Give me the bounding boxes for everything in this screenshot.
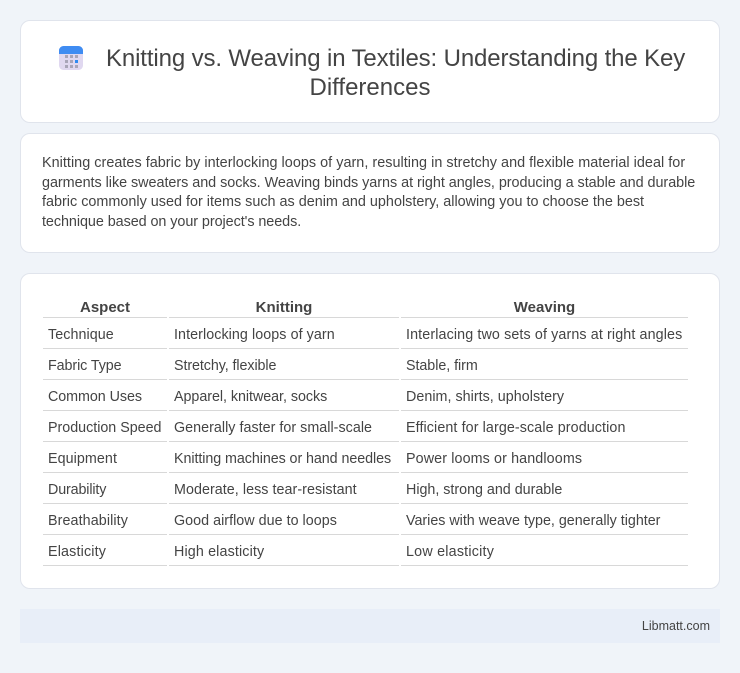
panel: title card: [20, 20, 720, 123]
comparison table: Production Speed: [48, 420, 162, 436]
comparison table: Varies with weave type, generally tighter: [406, 513, 660, 529]
comparison table: Breathability: [48, 513, 128, 529]
title: Differences: [310, 74, 430, 101]
comparison table: Durability: [48, 482, 106, 498]
text block: introduction: Knitting creates fabric by interlocking loops of yarn, resulting in stretchy and flexible material ideal for: [42, 155, 685, 171]
text block: introduction: technique based on your project's needs.: [42, 214, 301, 230]
comparison table: Apparel, knitwear, socks: [174, 389, 327, 405]
comparison table: Stretchy, flexible: [174, 358, 276, 374]
title: Knitting vs. Weaving in Textiles: Understanding the Key: [106, 45, 685, 72]
comparison table: Elasticity: [48, 544, 106, 560]
icon: calendar grid: [59, 46, 83, 70]
comparison table: Common Uses: [48, 389, 142, 405]
title: [106, 45, 686, 101]
text block: introduction: [42, 155, 695, 230]
comparison table: Technique: [48, 327, 114, 343]
comparison table: Fabric Type: [48, 358, 122, 374]
comparison table: Low elasticity: [406, 544, 494, 560]
comparison table: Interlocking loops of yarn: [174, 327, 335, 343]
footer bar: [20, 609, 720, 643]
comparison table: Efficient for large-scale production: [406, 420, 626, 436]
panel: comparison table: [20, 273, 720, 589]
comparison table: Knitting: [256, 299, 312, 316]
comparison table: Good airflow due to loops: [174, 513, 337, 529]
panel: introduction: [20, 133, 720, 253]
footer source: Libmatt.com: [642, 619, 710, 633]
comparison table: Moderate, less tear-resistant: [174, 482, 357, 498]
comparison table: Weaving: [514, 299, 575, 316]
comparison table: Power looms or handlooms: [406, 451, 582, 467]
comparison table: [43, 299, 688, 566]
comparison table: Stable, firm: [406, 358, 478, 374]
comparison table: Aspect: [80, 299, 130, 316]
text block: introduction: fabric commonly used for items such as denim and upholstery, allowing you to choose the best: [42, 194, 644, 210]
comparison table: Generally faster for small-scale: [174, 420, 372, 436]
comparison table: Equipment: [48, 451, 117, 467]
comparison table: High, strong and durable: [406, 482, 562, 498]
comparison table: Denim, shirts, upholstery: [406, 389, 564, 405]
comparison table: Knitting machines or hand needles: [174, 451, 391, 467]
comparison table: High elasticity: [174, 544, 264, 560]
comparison table: Interlacing two sets of yarns at right angles: [406, 327, 682, 343]
text block: introduction: garments like sweaters and socks. Weaving binds yarns at right angles, producing a stable and durable: [42, 174, 695, 190]
